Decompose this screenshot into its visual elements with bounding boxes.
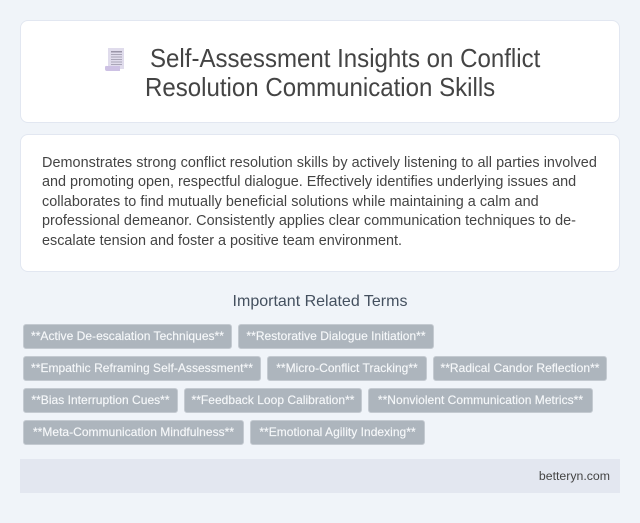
icon: document scroll [105,48,124,71]
panel: description card [20,134,620,272]
tag [368,388,593,413]
footer text: betteryn.com [539,469,610,483]
text block: description: collaborates to find mutually beneficial solutions while maintaining a calm and [42,194,539,210]
tag [250,420,425,445]
tag: **Radical Candor Reflection** [441,361,599,375]
text block: description: escalate tension and foster a positive team environment. [42,233,402,249]
tag: **Bias Interruption Cues** [31,393,170,407]
title [145,43,540,102]
tag: **Emotional Agility Indexing** [259,425,416,439]
tag: **Nonviolent Communication Metrics** [378,393,583,407]
footer bar [20,459,620,493]
tag [267,356,427,381]
tag: **Meta-Communication Mindfulness** [33,425,234,439]
tag [184,388,362,413]
tag: **Empathic Reframing Self-Assessment** [31,361,253,375]
title: Resolution Communication Skills [145,72,495,102]
tag [23,356,261,381]
tag: **Micro-Conflict Tracking** [276,361,418,375]
heading: related terms: Important Related Terms [233,293,407,310]
tag: **Active De-escalation Techniques** [31,329,224,343]
text block: description: and promoting open, respectful dialogue. Effectively identifies underlying issues and [42,174,576,190]
tag: **Restorative Dialogue Initiation** [246,329,426,343]
tag [238,324,434,349]
title: Self-Assessment Insights on Conflict [150,43,540,73]
text block: description [42,155,597,249]
tag [23,324,232,349]
tag list [23,324,607,445]
panel: title card [20,20,620,123]
text block: description: Demonstrates strong conflict resolution skills by actively listening to all parties involved [42,155,597,171]
tag: **Feedback Loop Calibration** [192,393,354,407]
tag [23,420,244,445]
tag [433,356,607,381]
tag [23,388,178,413]
text block: description: professional demeanor. Consistently applies clear communication techniques to de- [42,213,576,229]
